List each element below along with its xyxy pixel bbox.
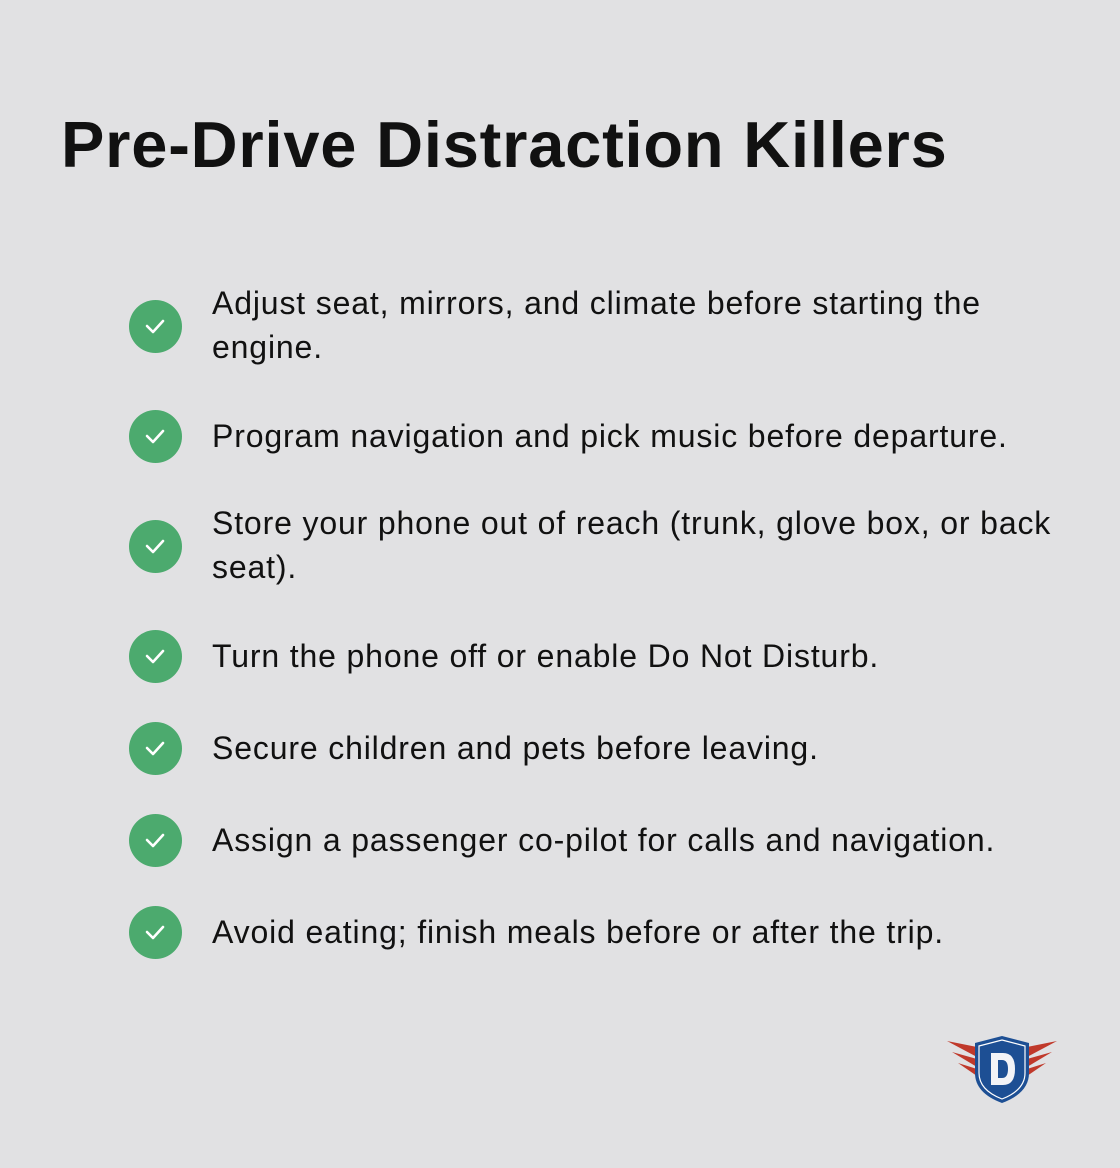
logo — [947, 1036, 1057, 1103]
item 5: Secure children and pets before leaving. — [212, 730, 819, 766]
item 7: Avoid eating; finish meals before or after the trip. — [212, 914, 944, 950]
item 3 — [129, 505, 1051, 585]
item 6: Assign a passenger co-pilot for calls and navigation. — [212, 822, 995, 858]
item 6 — [129, 814, 995, 867]
item 3: Store your phone out of reach (trunk, glove box, or back — [212, 505, 1051, 541]
item 4 — [129, 630, 879, 683]
item 1 — [129, 285, 981, 365]
item 4: Turn the phone off or enable Do Not Disturb. — [212, 638, 879, 674]
item 2: Program navigation and pick music before departure. — [212, 418, 1008, 454]
title: Pre-Drive Distraction Killers — [61, 108, 948, 181]
item 3: seat). — [212, 549, 297, 585]
item 7 — [129, 906, 944, 959]
item 1: Adjust seat, mirrors, and climate before starting the — [212, 285, 981, 321]
item 1: engine. — [212, 329, 323, 365]
item 2 — [129, 410, 1008, 463]
item 5 — [129, 722, 819, 775]
